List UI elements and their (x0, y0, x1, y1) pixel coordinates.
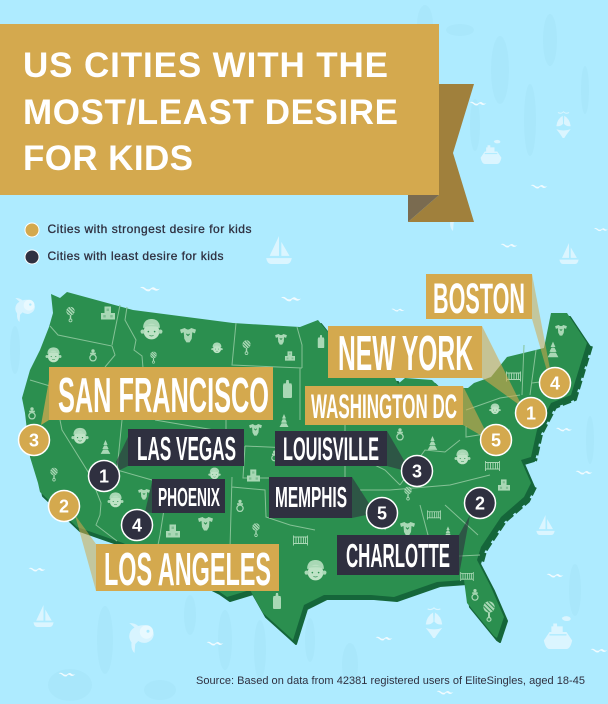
city label: New York: NEW YORK (338, 326, 473, 381)
rank marker: Phoenix 4: 4 (132, 516, 142, 536)
rank marker: Charlotte 2 (464, 488, 496, 518)
city label: Las Vegas: LAS VEGAS (137, 430, 236, 467)
title: FOR KIDS (23, 139, 193, 178)
map icons (29, 306, 567, 621)
rank marker: San Francisco 3: 3 (29, 430, 39, 450)
rank marker: Phoenix 4 (122, 510, 152, 540)
city label: Las Vegas (128, 429, 244, 467)
sea decoration: boats (33, 236, 579, 627)
title: MOST/LEAST DESIRE (23, 93, 398, 132)
city label: Memphis (269, 477, 352, 518)
rank marker: New York 1: 1 (526, 404, 536, 424)
legend: Cities with least desire for kids (48, 249, 224, 263)
rank marker: Memphis 5 (366, 498, 398, 528)
title: US CITIES WITH THE (23, 46, 388, 85)
rank marker: Washington DC 5 (480, 424, 512, 456)
rank marker: San Francisco 3 (18, 424, 50, 456)
city label: Boston (426, 274, 532, 323)
city label: Phoenix (152, 479, 225, 513)
sea decoration: bikinis and ships (426, 112, 572, 649)
rank marker: Los Angeles 2 (48, 490, 80, 522)
rank marker: Memphis 5: 5 (377, 504, 387, 524)
rank marker: Louisville 3: 3 (412, 462, 422, 482)
city label: San Francisco: SAN FRANCISCO (58, 368, 269, 423)
map of the United States (22, 292, 591, 644)
city label: Los Angeles (96, 543, 279, 595)
city label: Phoenix: PHOENIX (158, 482, 220, 512)
city label: Louisville: LOUISVILLE (283, 431, 379, 467)
rank marker: Charlotte 2: 2 (475, 494, 485, 514)
label connectors (41, 274, 550, 591)
rank marker: Boston 4: 4 (550, 374, 560, 394)
title banner (0, 24, 439, 195)
rank marker: Los Angeles 2: 2 (59, 496, 69, 516)
rank marker: New York 1 (516, 398, 546, 428)
city label: Memphis: MEMPHIS (275, 482, 347, 514)
city label: Washington DC: WASHINGTON DC (311, 388, 457, 426)
city label: New York (328, 326, 482, 381)
city label: Los Angeles: LOS ANGELES (104, 543, 271, 595)
city label: Charlotte (337, 535, 459, 575)
rank marker: Boston 4 (540, 368, 570, 398)
city label: Charlotte: CHARLOTTE (346, 537, 450, 574)
city label: Washington DC (305, 386, 463, 426)
rank marker: Las Vegas 1: 1 (99, 466, 109, 486)
source note: Source: Based on data from 42381 registered users of EliteSingles, aged 18-45 (196, 675, 585, 687)
title banner ribbon (408, 84, 474, 222)
city label: Louisville (275, 431, 387, 467)
sea decoration: fish (15, 203, 471, 653)
rank marker: Louisville 3 (402, 456, 432, 486)
legend: Cities with strongest desire for kids (48, 222, 252, 236)
rank marker: Las Vegas 1 (88, 460, 120, 492)
title (23, 46, 398, 178)
rank marker: Washington DC 5: 5 (491, 430, 501, 450)
legend (25, 222, 252, 264)
city label: San Francisco (49, 367, 273, 423)
